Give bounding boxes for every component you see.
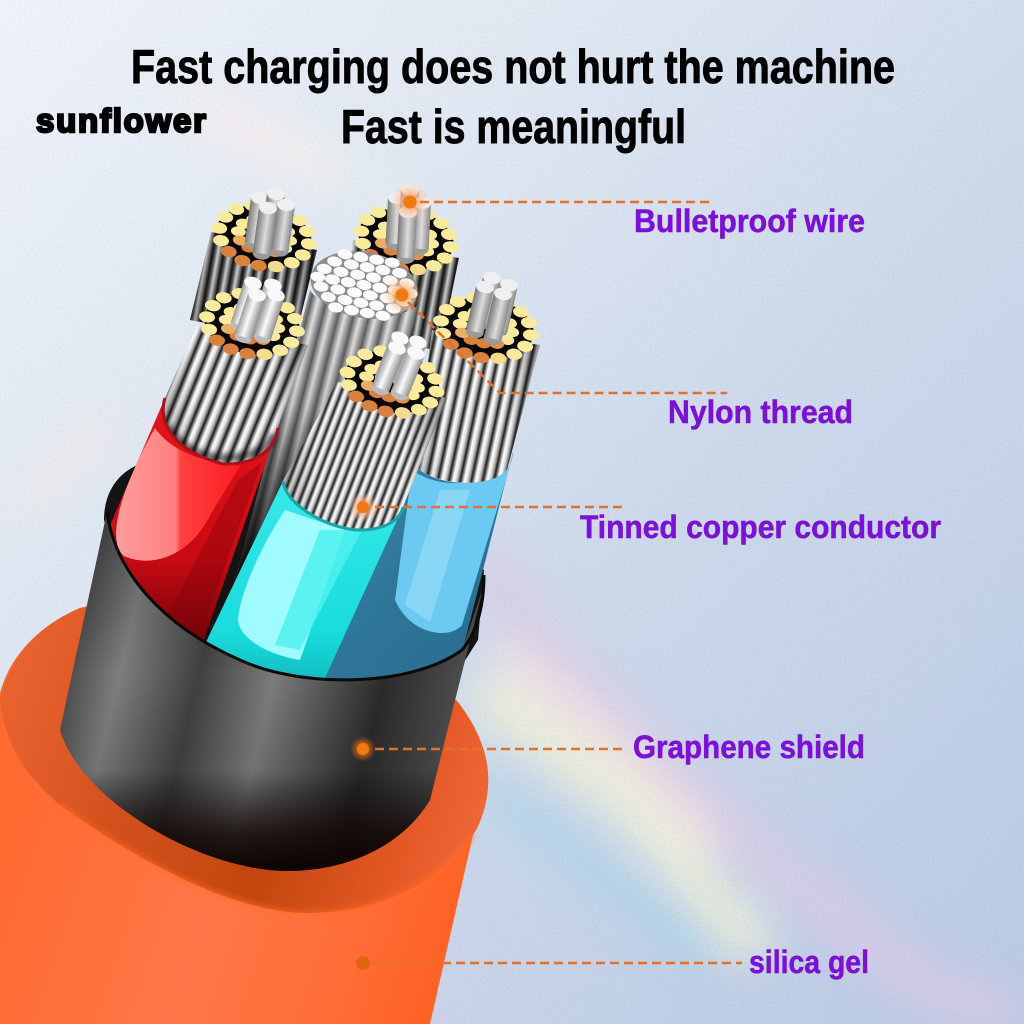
shield interior [104, 460, 484, 705]
title: Fast is meaningful [341, 100, 686, 153]
graphene shield [60, 512, 484, 871]
title: Fast charging does not hurt the machine [131, 40, 895, 93]
blue insulated conductor [325, 272, 540, 678]
callout: nylon thread: Nylon thread [668, 394, 853, 430]
callout: bulletproof wire: Bulletproof wire [634, 203, 865, 239]
title [131, 40, 895, 153]
cyan insulated conductor [206, 332, 447, 678]
callout: graphene shield: Graphene shield [633, 729, 865, 765]
callout: silica gel: silica gel [749, 944, 869, 980]
callout: graphene shield [350, 729, 865, 765]
callout: bulletproof wire [391, 183, 865, 239]
callout: tinned copper conductor: Tinned copper conductor [580, 509, 941, 545]
callout: tinned copper conductor [348, 492, 941, 545]
callout: silica gel [356, 944, 869, 980]
orange silica gel outer jacket [0, 560, 488, 1024]
back-left conductor [190, 187, 323, 340]
back-right conductor (bulletproof core) [345, 184, 465, 350]
callout: nylon thread [383, 276, 853, 430]
red insulated conductor [108, 275, 310, 665]
brand logo: sunflower: sunflower [36, 102, 206, 139]
central nylon thread bundle [225, 243, 423, 620]
